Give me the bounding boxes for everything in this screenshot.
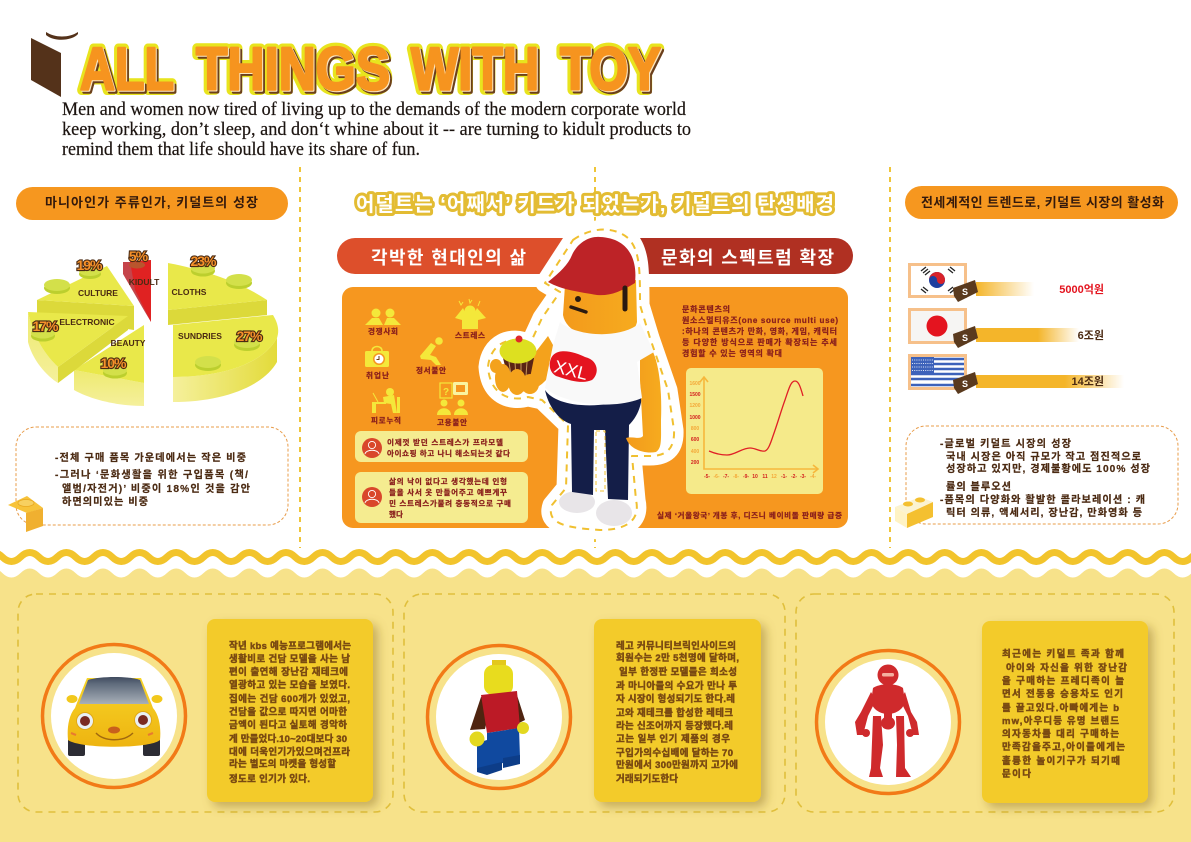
label: fatigue: 피로누적 (371, 415, 401, 425)
pie labels: SUNDRIES (178, 331, 222, 341)
line chart: -2- (791, 474, 797, 480)
card: robot text: 훌륭한 놀이기구가 되기때 (1002, 755, 1120, 767)
callout: left note: -그러나 ‘문화생활을 위한 구입품목 (책/ (55, 468, 248, 481)
pie labels: CLOTHS (172, 287, 207, 297)
callout: left note: -전체 구매 품목 가운데에서는 작은 비중 (55, 451, 246, 464)
callout: right note: 성장하고 있지만, 경제불황에도 100% 성장 (946, 462, 1151, 475)
card: robot text: 를 끌고있다.아빠에게는 b (1002, 702, 1119, 714)
face (571, 296, 586, 312)
bar: korea (910, 264, 1104, 302)
title: WITH (414, 38, 542, 105)
shirt (545, 322, 654, 405)
card: lego text: 고와 재테크를 합성한 레테크 (616, 707, 733, 719)
panel: lego (404, 594, 785, 812)
intro text: keep working, don’t sleep, and don‘t whine about it -- are turning to kidult products to (62, 120, 691, 140)
icon: car (42, 644, 186, 788)
bar: japan: S (962, 333, 968, 343)
callout: right note: -글로벌 키덜트 시장의 성장 (940, 437, 1072, 450)
slice: beauty (74, 325, 144, 406)
pie labels: 27% (236, 328, 263, 344)
callout: left note: 앨범/자전거)’ 비중이 18%인 것을 감안 (62, 482, 251, 495)
shoes (559, 491, 632, 526)
title: ALL (80, 36, 174, 103)
icon: stress (455, 299, 486, 329)
card: car text: 작년 kbs 예능프로그램에서는 (229, 640, 351, 652)
card: lego text: 일부 한정판 모델들은 희소성 (619, 666, 737, 678)
icon: brown box (31, 32, 78, 97)
title: TOY (562, 38, 664, 105)
line chart: 12 (771, 474, 777, 480)
line chart: 800 (691, 426, 699, 432)
card: car text: 편이 출연해 장난감 재테크에 (229, 666, 348, 678)
panel: orange center (342, 287, 848, 528)
intro text: remind them that life should have its share of fun. (62, 140, 420, 160)
panel: robot (796, 594, 1174, 812)
card: car text: 열광하고 있는 모습을 보였다. (229, 679, 350, 691)
card: car text (207, 619, 373, 802)
title: WITH (411, 36, 539, 102)
label: stress: 스트레스 (455, 330, 485, 340)
arm right (626, 350, 661, 452)
card: car text: 라는 별도의 마켓을 형성할 (229, 758, 336, 770)
quote box 2 (355, 472, 528, 523)
card: robot text: 아이와 자신을 위한 장난감 (1006, 662, 1127, 674)
card: lego text: 회원수는 2만 5천명에 달하며, (616, 652, 739, 664)
pie labels: KIDULT (129, 277, 160, 287)
line chart: -5- (704, 474, 710, 480)
card: robot text: 을 구매하는 프레디족이 늘 (1002, 675, 1124, 687)
icon: anxiety (420, 337, 443, 365)
title (80, 36, 664, 105)
quote box 1: 아이쇼핑 하고 나니 해소되는것 같다 (387, 448, 510, 458)
line chart: -6- (713, 474, 720, 480)
quote box 1 (355, 431, 528, 462)
sticker outline (488, 230, 674, 530)
line chart: 600 (691, 437, 699, 443)
quote box 2: 민 스트레스가풀려 충동적으로 구매 (389, 498, 511, 508)
pie chart (28, 248, 278, 406)
card: robot text: mw,아우디등 유명 브랜드 (1002, 715, 1119, 727)
text: culture contents: 경험할 수 있는 영역의 확대 (682, 348, 782, 358)
pie labels (32, 248, 263, 371)
title: ALL (81, 36, 175, 104)
card: robot text: 최근에는 키덜트 족과 함께 (1002, 648, 1124, 660)
card: lego text: 자 시장이 형성되기도 한다.레 (616, 693, 735, 705)
text: culture contents: 문화콘텐츠의 (682, 304, 730, 314)
heading: right pill: 전세계적인 트렌드로, 키덜트 시장의 활성화 (921, 195, 1164, 210)
title: WITH (412, 36, 540, 104)
icon: job hunting (365, 346, 389, 367)
title: THINGS (196, 36, 390, 103)
line chart: 400 (691, 449, 699, 455)
card: car text: 대에 더욱인기가있으며건프라 (229, 746, 350, 758)
pie labels: 10% (100, 355, 127, 371)
card: car text: 집에는 건담 600개가 있었고, (229, 693, 350, 705)
card: car text: 금액이 된다고 실토해 경악하 (229, 719, 347, 731)
caption: chart: 실제 ‘거울왕국’ 개봉 후, 디즈니 베이비돌 판매량 급증 (657, 510, 842, 520)
callout: right note: 국내 시장은 아직 규모가 작고 점진적으로 (946, 450, 1141, 463)
callout: right note (906, 426, 1178, 524)
line chart: -1- (781, 474, 787, 480)
intro text: Men and women now tired of living up to the demands of the modern corporate world (62, 100, 687, 120)
shirt logo (550, 351, 597, 384)
banner: left: 각박한 현대인의 삶 (371, 248, 526, 268)
quote box 2: 했다 (389, 509, 403, 519)
pie labels: BEAUTY (111, 338, 146, 348)
line chart: -3- (800, 474, 806, 480)
pie labels: 5% (129, 248, 149, 264)
card: lego text: 구입가의수십배에 달하는 70 (616, 747, 733, 759)
card: robot text: 의자동차를 대리 구매하는 (1002, 728, 1119, 740)
title: THINGS (196, 36, 390, 102)
callout: right note: 률의 블루오션 (946, 480, 1011, 493)
title: TOY (560, 36, 661, 103)
callout: left note (16, 427, 288, 525)
text: culture contents: :하나의 콘텐츠가 만화, 영화, 게임, 캐릭터 (682, 326, 837, 336)
title: WITH (411, 36, 539, 103)
quote box 2: 들을 사서 옷 만들어주고 예쁘게꾸 (389, 487, 507, 497)
title: TOY (561, 36, 662, 104)
slice: electronic (28, 312, 128, 383)
quote box 1: 이제껏 받던 스트레스가 프라모델 (387, 437, 503, 447)
line chart: -8- (733, 474, 739, 480)
line chart: -9- (743, 474, 749, 480)
title: THINGS (197, 36, 391, 104)
card: lego text: 거래되기도한다 (616, 773, 678, 785)
head (563, 280, 637, 340)
slice: kidult (123, 260, 151, 322)
lower section background (0, 568, 1191, 842)
card: robot text: 문이다 (1002, 768, 1031, 780)
line chart: 1000 (689, 415, 701, 421)
card: lego text: 라는 신조어까지 등장했다.레 (616, 720, 733, 732)
card: lego text: 과 마니아들의 수요가 만나 투 (616, 680, 737, 692)
heading: right pill (905, 186, 1178, 219)
card: car text: 건담을 값으로 따지면 어마한 (229, 706, 347, 718)
banner: right (620, 238, 853, 274)
pants (545, 390, 642, 500)
heading: center: 어덜트는 ‘어째서’ 키드가 되었는가, 키덜트의 탄생배경 (356, 193, 834, 216)
quote box 2: 삶의 낙이 없다고 생각했는데 인형 (389, 476, 507, 486)
icon: employment anxiety: ? (443, 387, 449, 398)
bar: usa: S (962, 379, 968, 389)
label: anxiety: 정서불안 (416, 365, 446, 375)
bar: korea: S (962, 287, 968, 297)
line chart (686, 368, 823, 494)
cap (548, 237, 635, 295)
label: competition: 경쟁사회 (368, 326, 398, 336)
pie labels: 23% (190, 253, 217, 269)
icon: lego brick right (895, 497, 933, 528)
bar: usa: 14조원 (1072, 374, 1104, 388)
slit between legs (596, 431, 605, 491)
wave divider (0, 552, 1191, 562)
line chart: -4- (810, 474, 816, 480)
line chart: 1600 (689, 381, 701, 387)
text: culture contents: 원소스멀티유즈(one source multi use) (682, 315, 838, 325)
heading: left pill (16, 187, 288, 220)
banner: left (337, 238, 570, 274)
pie labels: CULTURE (78, 288, 118, 298)
line chart: 11 (762, 474, 768, 480)
label: employment anxiety: 고용불안 (437, 417, 467, 427)
heading: left pill: 마니아인가 주류인가, 키덜트의 성장 (45, 195, 258, 210)
icon: fatigue (372, 388, 400, 413)
slice: sundries (173, 315, 278, 402)
strap (622, 288, 628, 309)
card: lego text: 고는 일부 인기 제품의 경우 (616, 733, 730, 745)
card: lego text: 만원에서 300만원까지 고가에 (616, 759, 738, 771)
line chart: 1200 (689, 403, 701, 409)
icon: lego brick left (8, 496, 43, 532)
arm left (510, 336, 553, 392)
line chart: 1500 (689, 392, 701, 398)
icon: employment anxiety (437, 382, 468, 415)
callout: right note: 릭터 의류, 액세서리, 장난감, 만화영화 등 (946, 506, 1142, 519)
bar: japan: 6조원 (1078, 328, 1104, 342)
card: robot text: 만족감을주고,아이들에게는 (1002, 741, 1125, 753)
cupcake (490, 336, 539, 395)
line chart: -7- (723, 474, 729, 480)
character with cupcake (488, 230, 674, 530)
bar: japan (910, 310, 1104, 348)
card: car text: 정도로 인기가 있다. (229, 773, 310, 785)
pie labels: 17% (32, 318, 59, 334)
card: lego text: 레고 커뮤니티브릭인사이드의 (616, 640, 736, 652)
intro text (62, 100, 691, 160)
bar: usa (910, 356, 1124, 394)
shirt logo: XXL (552, 356, 590, 384)
title: ALL (80, 36, 174, 102)
bar: korea: 5000억원 (1059, 282, 1104, 296)
card: lego text (594, 619, 761, 802)
card: robot text: 면서 전동용 승용차도 인기 (1002, 688, 1123, 700)
panel: car (18, 594, 393, 812)
icon: competition (365, 308, 401, 325)
card: robot text (982, 621, 1148, 803)
line chart: 200 (691, 460, 699, 466)
callout: right note: -품목의 다양화와 활발한 콜라보레이션 : 캐 (940, 493, 1145, 506)
title: ALL (82, 38, 176, 105)
card: car text: 생활비로 건담 모델을 사는 남 (229, 653, 350, 665)
icon: robot (816, 650, 960, 794)
title: THINGS (198, 38, 392, 105)
text: culture contents: 등 다양한 방식으로 판매가 확장되는 추세 (682, 337, 837, 347)
banner: right: 문화의 스펙트럼 확장 (661, 248, 834, 268)
icon: lego figure (428, 646, 570, 788)
text: culture contents (682, 304, 838, 358)
line chart: 10 (752, 474, 758, 480)
slice: cloths (168, 262, 267, 325)
pie labels: 19% (76, 257, 103, 273)
callout: left note: 하면의미있는 비중 (62, 495, 148, 508)
card: car text: 게 만들었다.10~20대보다 30 (229, 733, 347, 745)
label: job hunting: 취업난 (366, 370, 389, 380)
slice: culture (37, 266, 134, 330)
pie labels: ELECTRONIC (59, 317, 115, 327)
title: TOY (560, 36, 661, 102)
